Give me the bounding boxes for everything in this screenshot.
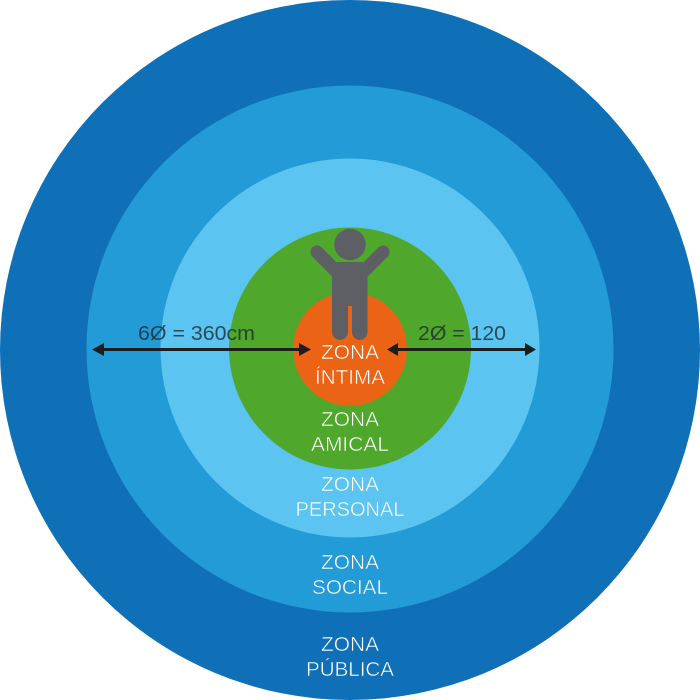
label: zona amical: ZONA: [321, 409, 380, 431]
circle: zona personal: [160, 158, 540, 538]
label: zona amical: AMICAL: [311, 434, 389, 456]
circle: zona íntima: [293, 292, 407, 406]
arrow: 2Ø span: [387, 343, 536, 356]
circle: zona amical: [229, 228, 471, 470]
label: zona personal: PERSONAL: [296, 499, 404, 521]
label: 6Ø = 360cm: 6Ø = 360cm: [138, 323, 255, 345]
label: zona íntima: ÍNTIMA: [315, 366, 386, 389]
label: zona pública: ZONA: [321, 634, 380, 656]
label: zona íntima: [315, 342, 386, 389]
label: 2Ø = 120: 2Ø = 120: [418, 323, 506, 345]
label: zona social: [312, 552, 388, 599]
label: zona social: SOCIAL: [312, 577, 388, 599]
label: zona social: ZONA: [321, 552, 380, 574]
label: zona amical: [311, 409, 389, 456]
circle: zona social: [86, 86, 614, 612]
label: zona pública: [306, 634, 395, 681]
icon: person with raised arms: [317, 229, 383, 340]
arrow: 6Ø span: [92, 343, 311, 356]
label: zona pública: PÚBLICA: [306, 658, 395, 681]
label: zona personal: [296, 474, 404, 521]
label: zona personal: ZONA: [321, 474, 380, 496]
label: zona íntima: ZONA: [321, 342, 380, 364]
